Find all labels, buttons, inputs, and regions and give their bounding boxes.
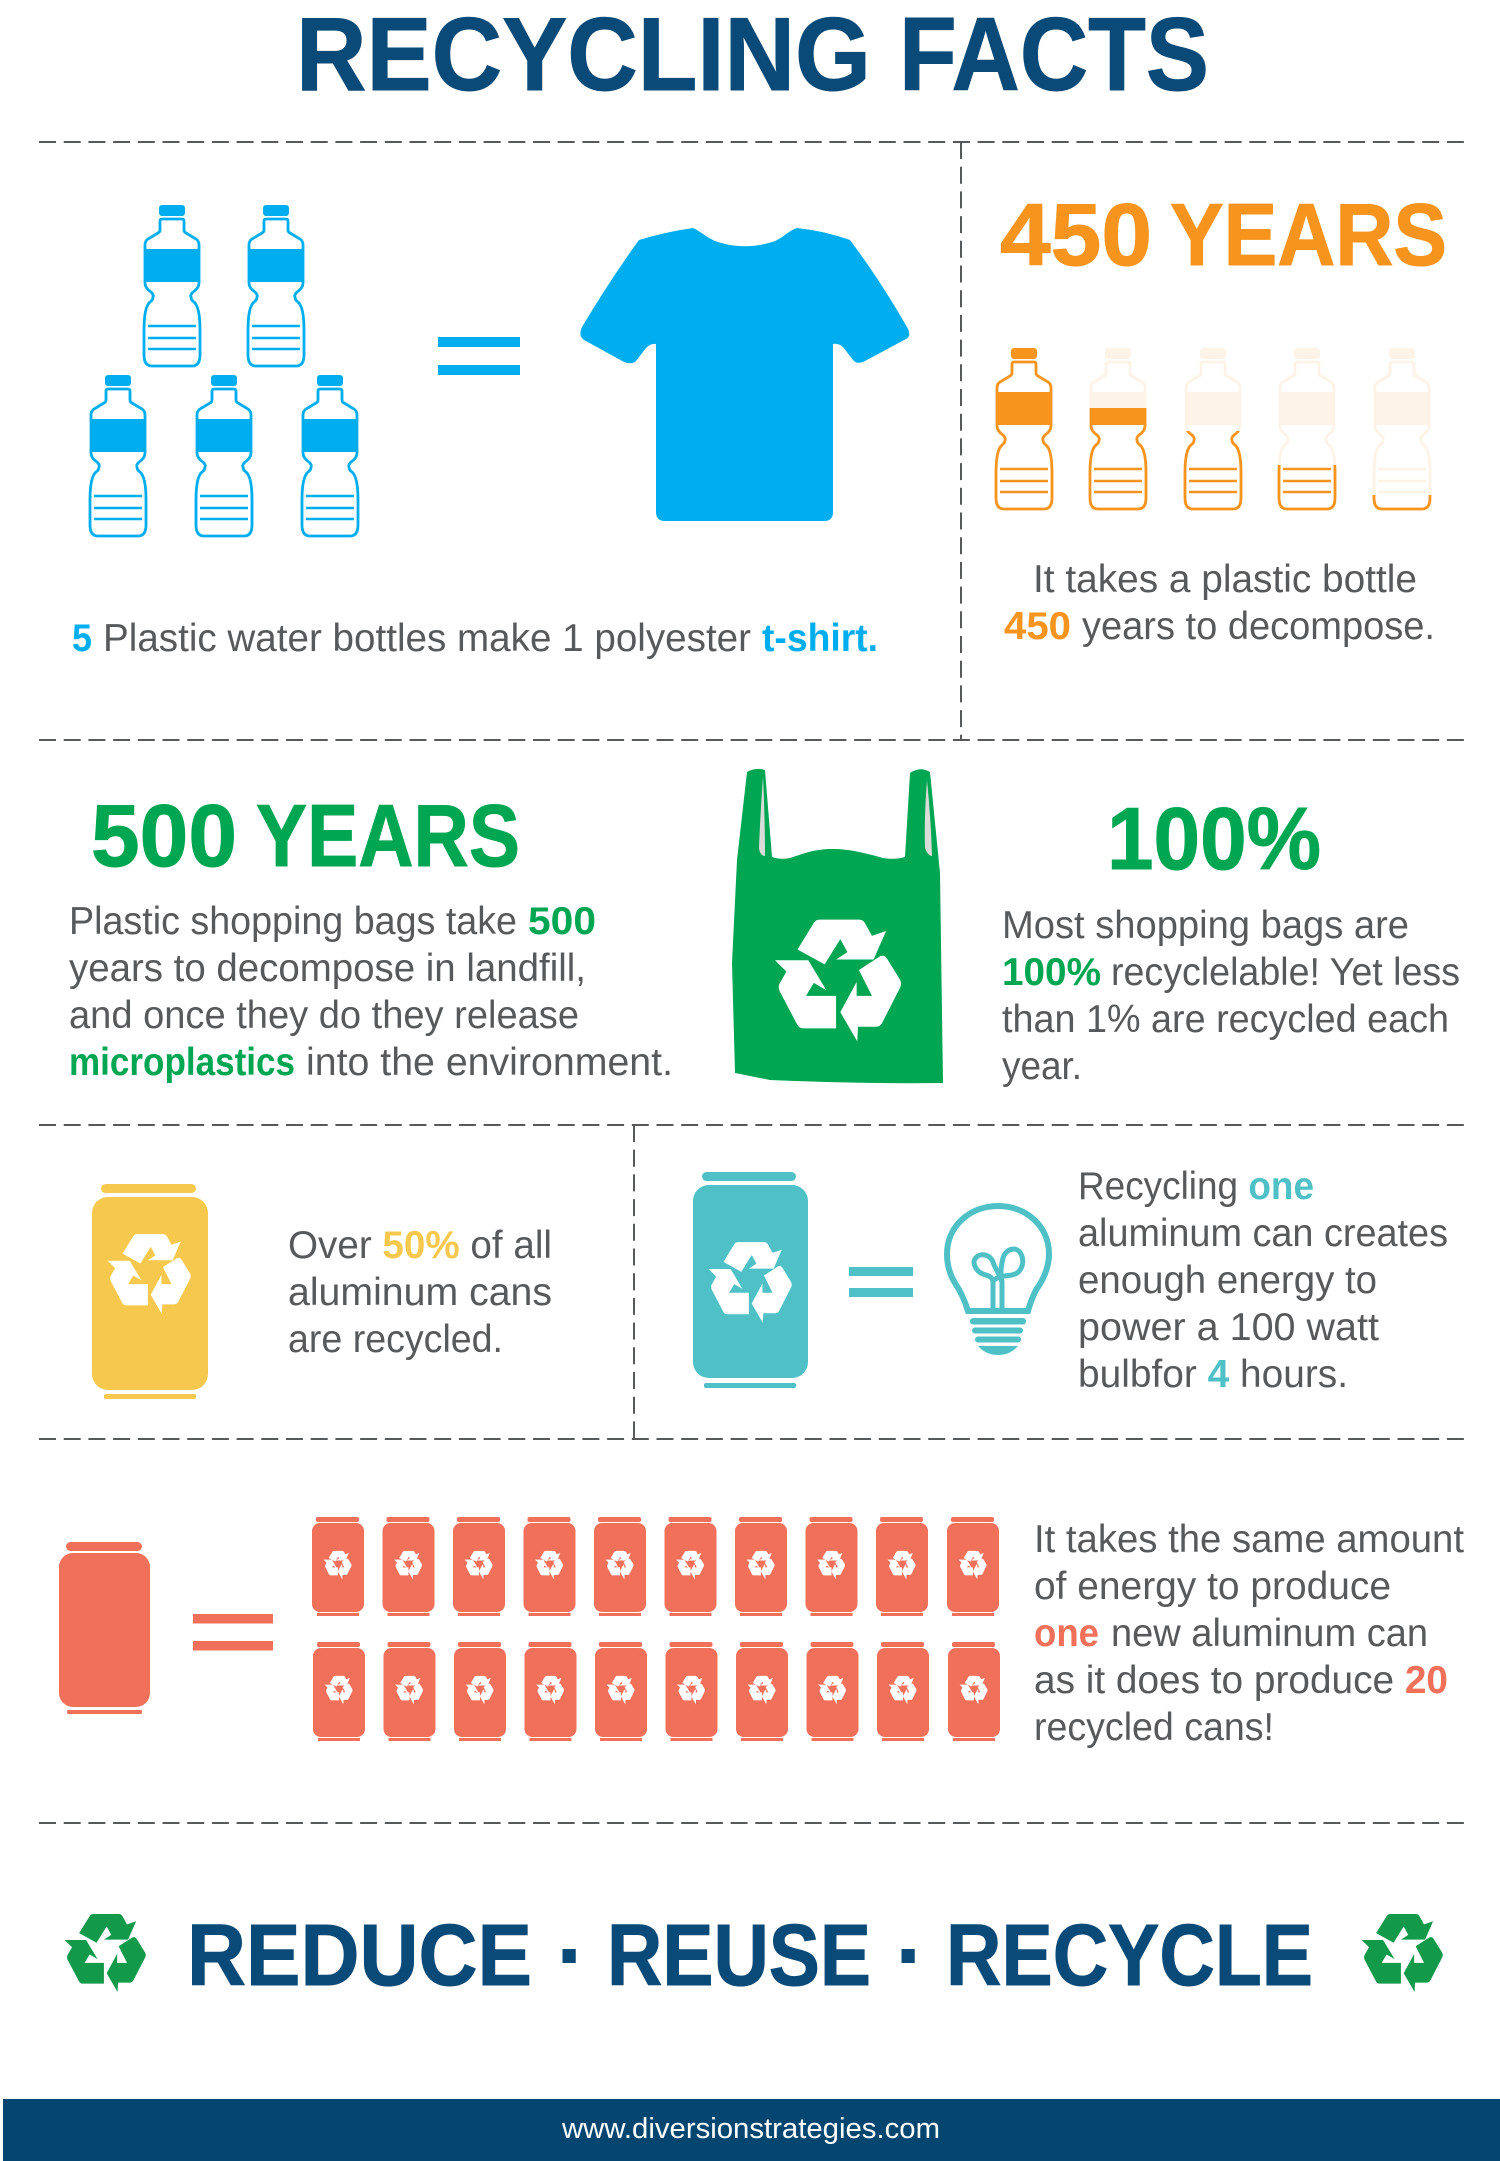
title: RECYCLING	[296, 0, 871, 113]
icon: teal can	[693, 1172, 808, 1388]
icon: new can	[59, 1542, 150, 1714]
text: bag recycling: year.	[1002, 1045, 1082, 1088]
text: bag recycling: than 1% are recycled each	[1002, 998, 1449, 1041]
text: bottle decomposition: 450	[1004, 605, 1071, 648]
panel: 450 years	[996, 185, 1447, 648]
text: can energy fact: bulbfor 4 hours.	[1078, 1353, 1348, 1396]
icon: twenty recycled cans	[312, 1517, 1000, 1741]
text: bag decomposition: Plastic shopping bags take	[69, 900, 517, 943]
slogan text: ·	[557, 1907, 586, 2004]
text: bottle decomposition: It takes a plastic bottle	[1033, 558, 1417, 601]
text: bag recycling: 100%	[1002, 951, 1101, 994]
icon: five plastic bottles	[90, 205, 358, 536]
footer url: www.diversionstrategies.com	[561, 2113, 940, 2145]
text: can recycling rate: are recycled.	[288, 1318, 503, 1361]
text: bag decomposition: years to decompose in landfill,	[69, 947, 586, 990]
panel: bottles to t-shirt	[72, 205, 909, 660]
icon: decomposing bottles	[996, 348, 1430, 509]
text: bag decomposition: into the environment.	[306, 1041, 673, 1084]
panel: new vs recycled cans	[59, 1517, 1464, 1749]
text: can production fact: new aluminum can	[1111, 1612, 1428, 1655]
text: bag decomposition: 500	[528, 900, 596, 943]
text: bag decomposition: microplastics	[69, 1041, 295, 1084]
text: bottle decomposition	[1004, 558, 1435, 648]
icon: shopping bag	[732, 769, 943, 1083]
icon: equals sign	[438, 337, 520, 375]
heading: 450 years	[1000, 185, 1447, 284]
slogan text: RECYCLE	[946, 1907, 1313, 2004]
text: bag recycling: recyclelable! Yet less	[1111, 951, 1460, 994]
heading: 500 years	[91, 786, 520, 885]
text: can production fact: one	[1034, 1612, 1099, 1655]
panel: aluminum cans recycled	[92, 1184, 552, 1399]
icon: equals sign	[849, 1267, 913, 1297]
text: can production fact: as it does to produce 20	[1034, 1659, 1448, 1702]
text: t-shirt fact: 5	[72, 617, 92, 660]
text: can energy fact	[1078, 1165, 1448, 1396]
text: can energy fact: power a 100 watt	[1078, 1306, 1379, 1349]
text: can production fact: recycled cans!	[1034, 1706, 1274, 1749]
text: t-shirt fact: Plastic water bottles make 1 polyester	[103, 617, 751, 660]
text: can recycling rate: Over 50% of all	[288, 1224, 552, 1267]
text: can recycling rate: aluminum cans	[288, 1271, 552, 1314]
text: can energy fact: Recycling one	[1078, 1165, 1314, 1208]
title	[296, 0, 1209, 113]
slogan text: ·	[896, 1907, 925, 2004]
heading: 500 years: YEARS	[256, 786, 520, 885]
slogan text	[187, 1907, 1313, 2004]
icon: light bulb	[947, 1206, 1049, 1355]
slogan banner	[65, 1907, 1443, 2004]
heading: 100%: 100%	[1107, 789, 1321, 888]
text: bottle decomposition: years to decompose.	[1082, 605, 1435, 648]
text: t-shirt fact: t-shirt.	[762, 617, 878, 660]
text: can production fact	[1034, 1518, 1464, 1749]
text: can energy fact: aluminum can creates	[1078, 1212, 1448, 1255]
heading: 500 years: 500	[91, 786, 237, 885]
slogan text: REDUCE	[187, 1907, 532, 2004]
text: bag recycling	[1002, 904, 1460, 1088]
icon: yellow can	[92, 1184, 208, 1399]
text: bag recycling: Most shopping bags are	[1002, 904, 1409, 947]
text: bag decomposition: and once they do they release	[69, 994, 579, 1037]
text: bag decomposition	[69, 900, 673, 1084]
heading: 450 years: YEARS	[1170, 185, 1447, 284]
icon: equals sign	[193, 1614, 273, 1650]
text: can production fact: of energy to produce	[1034, 1565, 1391, 1608]
text: can recycling rate	[288, 1224, 552, 1361]
panel: can energy	[693, 1165, 1448, 1396]
icon: recycle symbol left	[65, 1914, 146, 1992]
panel: plastic bags	[69, 769, 1460, 1088]
icon: recycle symbol right	[1362, 1914, 1443, 1992]
text: can production fact: It takes the same amount	[1034, 1518, 1464, 1561]
icon: t-shirt	[580, 228, 909, 521]
title: FACTS	[899, 0, 1209, 113]
footer bar	[3, 2099, 1500, 2161]
heading: 450 years: 450	[1000, 185, 1152, 284]
text: can energy fact: enough energy to	[1078, 1259, 1377, 1302]
slogan text: REUSE	[607, 1907, 871, 2004]
